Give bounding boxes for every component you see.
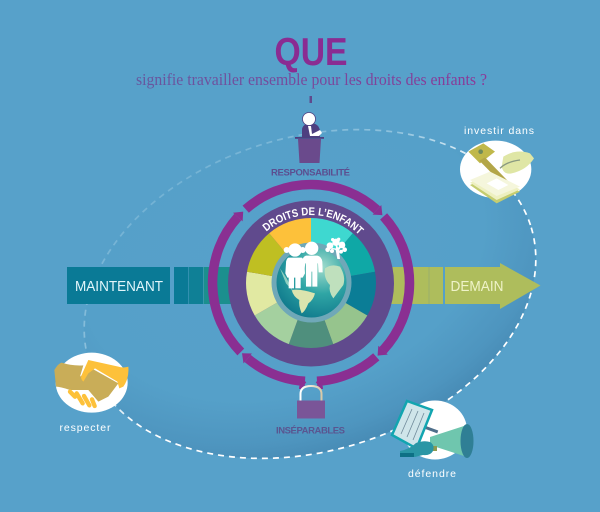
timeline arrow: demain bbox=[385, 263, 540, 309]
droits de l'enfant label: DROITS DE L’ENFANT bbox=[262, 207, 364, 234]
label: investir dans: investir dans bbox=[464, 125, 534, 137]
globe bbox=[272, 242, 352, 322]
title: signifie travailler ensemble pour les droits des enfants ? bbox=[136, 70, 487, 89]
label: responsabilité: RESPONSABILITÉ bbox=[271, 168, 350, 178]
timeline bar: maintenant: MAINTENANT bbox=[75, 279, 163, 295]
icon: défendre bbox=[392, 400, 474, 460]
label: défendre: défendre bbox=[408, 468, 456, 480]
dashed ellipse path bbox=[44, 77, 576, 511]
title: QUE bbox=[274, 31, 348, 74]
rights colour wheel bbox=[246, 218, 376, 348]
icon: handshake bbox=[54, 353, 128, 413]
label: respecter: respecter bbox=[60, 422, 111, 434]
title bbox=[136, 31, 487, 89]
icon: tree bbox=[325, 238, 347, 259]
label: inséparables: INSÉPARABLES bbox=[276, 426, 345, 436]
central circular diagram bbox=[208, 180, 414, 389]
purple disc bbox=[228, 200, 394, 366]
icon: podium bbox=[295, 96, 324, 163]
icon: children bbox=[284, 242, 323, 288]
icon: padlock bbox=[297, 386, 325, 418]
icon: investir dans bbox=[460, 141, 534, 203]
timeline bar: maintenant bbox=[67, 267, 234, 304]
outer cycle arrows bbox=[213, 184, 410, 389]
timeline arrow: demain: DEMAIN bbox=[450, 279, 504, 295]
